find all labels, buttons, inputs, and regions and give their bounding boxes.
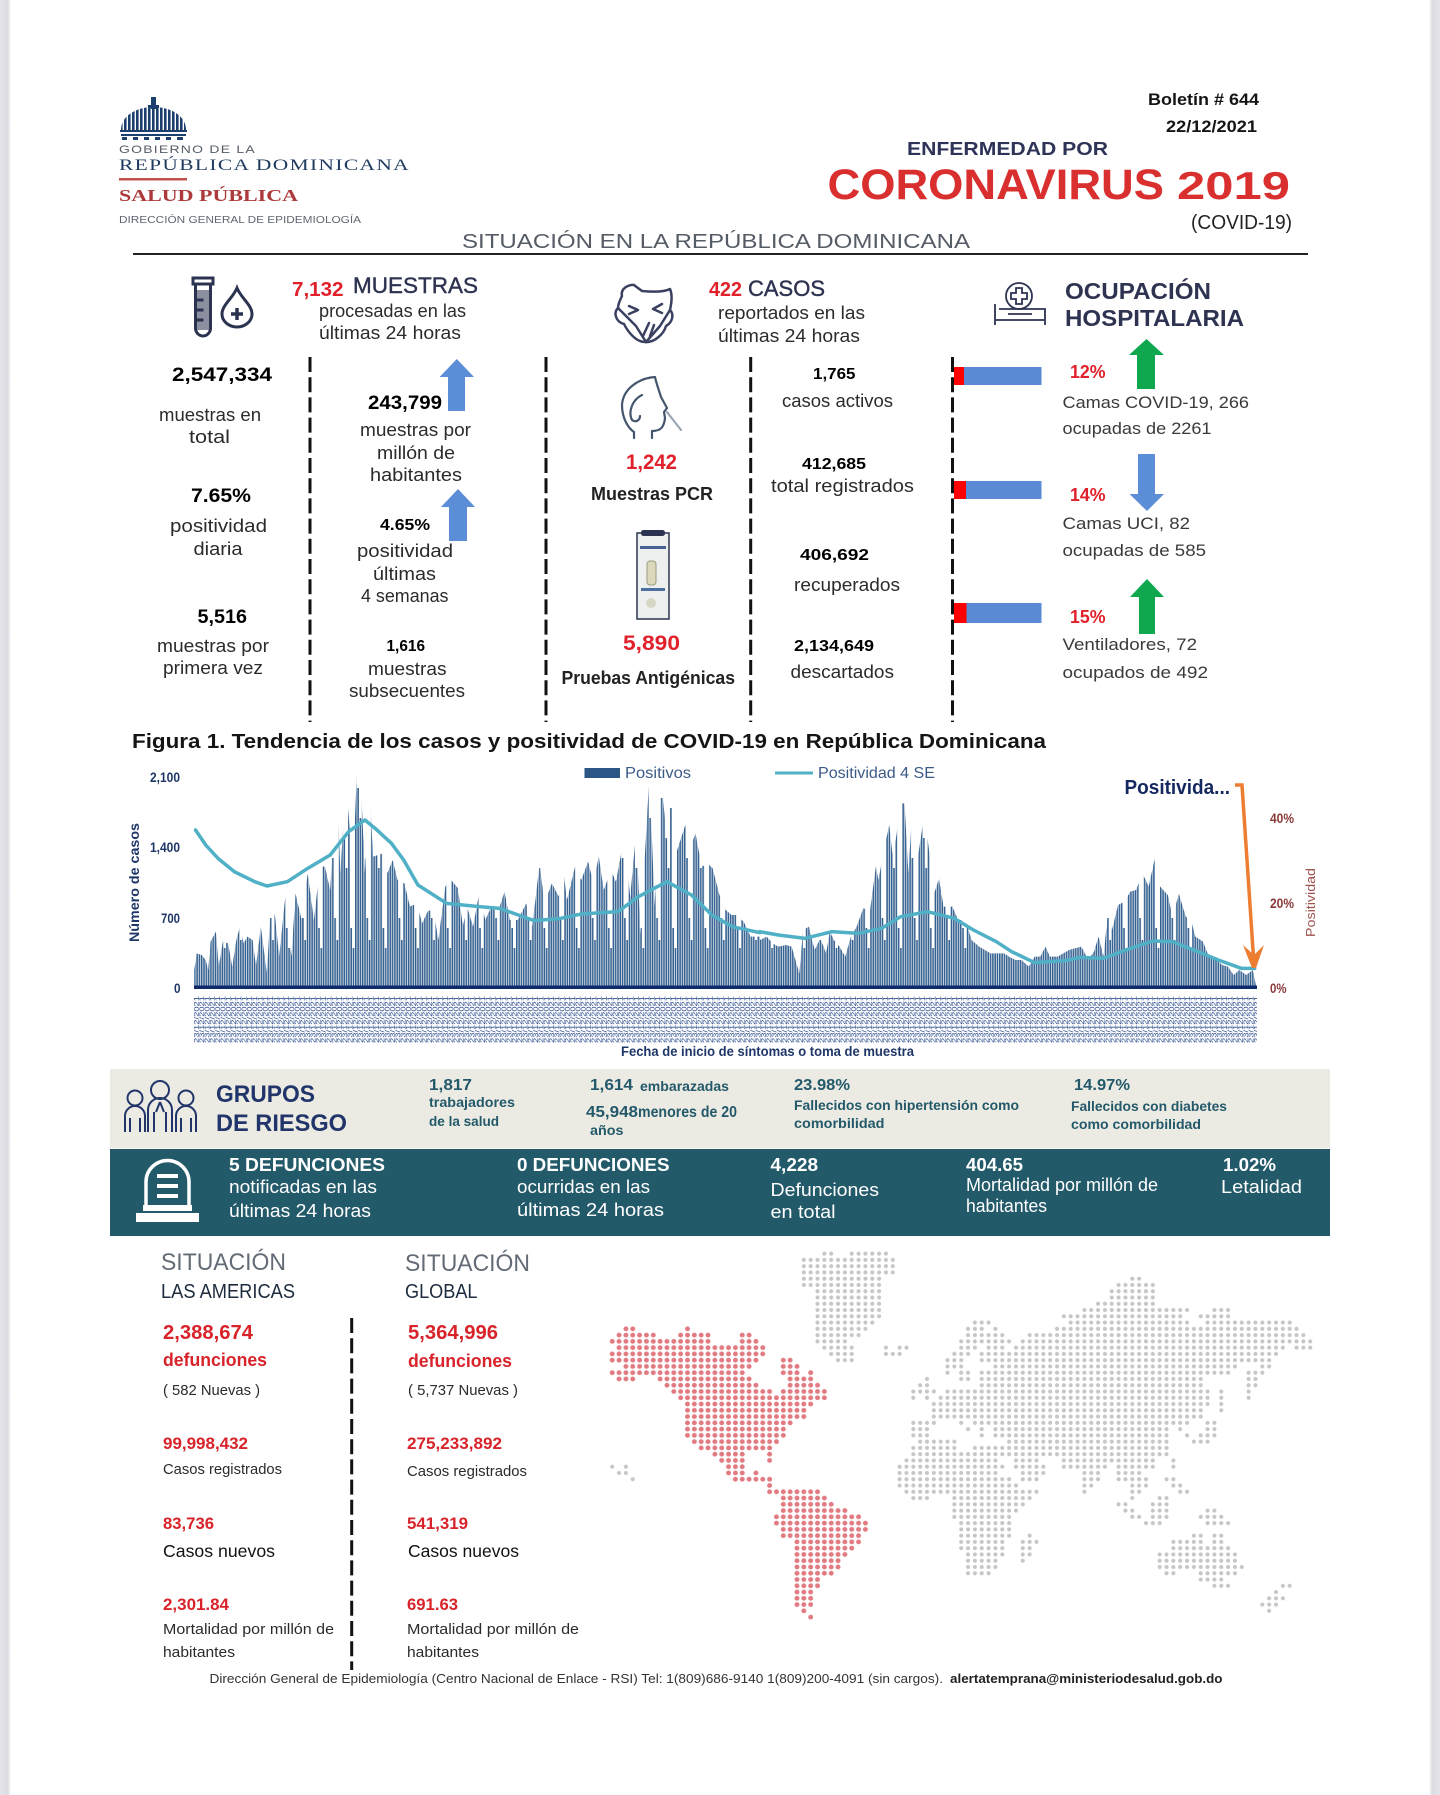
logo: Gobierno de la República Dominicana, Salud Pública: REPÚBLICA DOMINICANA	[119, 157, 410, 174]
panel: ocupación hospitalaria: ocupados de 492	[1062, 663, 1208, 682]
icon: blood drop	[222, 288, 252, 327]
panel: ocupación hospitalaria: ocupadas de 585	[1062, 541, 1206, 560]
panel: defunciones: últimas 24 horas	[229, 1201, 371, 1221]
title: CORONAVIRUS	[828, 161, 1164, 209]
panel: situación global: ( 5,737 Nuevas )	[408, 1383, 518, 1399]
panel: ocupación hospitalaria: OCUPACIÓN	[1065, 277, 1211, 304]
panel: grupos de riesgo: embarazadas	[640, 1078, 729, 1094]
arrow: blue down, camas UCI	[1130, 454, 1164, 511]
panel: muestras	[157, 273, 478, 701]
panel: grupos de riesgo: de la salud	[429, 1113, 499, 1129]
dashed column dividers	[310, 357, 952, 722]
panel: muestras: muestras por	[157, 636, 269, 656]
panel: muestras: positividad	[357, 541, 453, 561]
panel: defunciones: notificadas en las	[229, 1177, 377, 1197]
panel: ocupación hospitalaria: HOSPITALARIA	[1065, 305, 1244, 331]
panel: grupos de riesgo: 23.98%	[794, 1077, 850, 1094]
panel: casos: 2,134,649	[794, 638, 874, 655]
panel: muestras: procesadas en las	[319, 301, 466, 321]
line: positividad 4 SE	[196, 820, 1255, 968]
bulletin number and date: Boletín # 644	[1148, 90, 1260, 109]
callout: positividad arrow	[1124, 777, 1264, 968]
panel: casos: reportados en las	[718, 303, 865, 323]
panel: defunciones: 5 DEFUNCIONES	[229, 1155, 385, 1175]
panel: grupos de riesgo: comorbilidad	[794, 1115, 884, 1131]
right axis labels: Positividad	[1303, 868, 1318, 937]
panel: muestras: positividad	[170, 516, 267, 536]
title: ENFERMEDAD POR	[907, 139, 1108, 159]
panel: muestras: 243,799	[368, 393, 442, 414]
panel: casos: 5,890	[623, 632, 680, 655]
panel: defunciones: en total	[770, 1202, 836, 1222]
logo: Gobierno de la República Dominicana, Salud Pública: SALUD PÚBLICA	[119, 186, 299, 205]
footer contact line	[210, 1671, 1223, 1686]
panel: casos: recuperados	[794, 575, 900, 595]
panel: grupos de riesgo: 45,948	[586, 1104, 638, 1121]
left axis labels: 700	[161, 910, 180, 926]
footer contact line: Dirección General de Epidemiología (Centro Nacional de Enlace - RSI) Tel: 1(809)686-9140 1(809)200-4091 (sin cargos).	[210, 1671, 943, 1686]
bulletin number and date: 22/12/2021	[1166, 117, 1257, 136]
dot world map	[609, 1250, 1314, 1620]
panel: grupos de riesgo: trabajadores	[429, 1094, 515, 1110]
title: 2019	[1177, 165, 1290, 208]
icon: hospital bed	[995, 283, 1045, 325]
panel: grupos de riesgo: 14.97%	[1074, 1077, 1130, 1094]
icon: test tube	[193, 278, 213, 336]
left axis labels: 0	[174, 980, 181, 996]
bar: camas UCI	[954, 481, 1042, 499]
panel: casos: 422	[709, 279, 742, 301]
panel: muestras: 4 semanas	[361, 586, 448, 606]
panel: grupos de riesgo: GRUPOS	[216, 1081, 315, 1108]
panel: ocupación hospitalaria: 15%	[1070, 607, 1106, 627]
panel: defunciones: 0 DEFUNCIONES	[517, 1155, 670, 1175]
left axis labels: 2,100	[150, 769, 180, 785]
panel: situación global: defunciones	[408, 1351, 512, 1371]
panel: muestras: 7.65%	[191, 486, 251, 507]
panel: situación las Américas: 2,388,674	[163, 1322, 254, 1344]
panel: defunciones: últimas 24 horas	[517, 1200, 664, 1220]
panel: muestras: 1,616	[386, 638, 425, 655]
panel: ocupación hospitalaria: Camas COVID-19, 266	[1062, 393, 1249, 412]
panel: situación global: Casos registrados	[407, 1464, 527, 1480]
bar: camas COVID-19	[954, 367, 1042, 385]
subtitle with rule: SITUACIÓN EN LA REPÚBLICA DOMINICANA	[462, 230, 971, 253]
title	[828, 139, 1292, 234]
panel: casos: CASOS	[748, 276, 825, 301]
arrow: up, positividad últimas 4 semanas	[441, 489, 475, 541]
icon: tombstone	[136, 1160, 199, 1222]
panel: situación las Américas: LAS AMERICAS	[161, 1281, 295, 1303]
panel: grupos de riesgo: años	[590, 1122, 624, 1138]
panel: casos: 406,692	[800, 547, 869, 564]
panel: muestras: 2,547,334	[172, 365, 273, 386]
bar: ventiladores	[954, 603, 1042, 623]
x axis baseline	[194, 986, 1257, 989]
panel: casos: últimas 24 horas	[718, 326, 860, 346]
panel: muestras: subsecuentes	[349, 681, 465, 701]
panel: situación global: 541,319	[407, 1514, 468, 1533]
panel: ocupación hospitalaria: Camas UCI, 82	[1062, 514, 1190, 533]
panel: situación las Américas: defunciones	[163, 1350, 267, 1370]
panel: situación las Américas: habitantes	[163, 1645, 235, 1661]
panel: casos: descartados	[790, 662, 894, 682]
right axis labels: 40%	[1270, 810, 1294, 826]
panel: ocupación hospitalaria: Ventiladores, 72	[1062, 635, 1197, 654]
icon: people	[125, 1081, 196, 1132]
panel: grupos de riesgo: menores de 20	[638, 1104, 737, 1121]
panel: muestras: total	[189, 427, 230, 447]
panel: muestras: últimas 24 horas	[319, 323, 461, 343]
panel: grupos de riesgo: como comorbilidad	[1071, 1116, 1201, 1132]
panel: situación global: 275,233,892	[407, 1434, 502, 1453]
icon: face with mask	[616, 285, 672, 342]
panel: defunciones: Mortalidad por millón de	[966, 1175, 1158, 1195]
panel: casos: casos activos	[782, 391, 893, 411]
panel: muestras: muestras por	[360, 420, 471, 440]
panel: situación global: 5,364,996	[408, 1322, 498, 1344]
panel: defunciones: habitantes	[966, 1196, 1047, 1216]
bulletin number and date	[1148, 90, 1260, 136]
panel: situación global: SITUACIÓN	[405, 1250, 530, 1277]
x axis title: Fecha de inicio de síntomas o toma de muestra	[621, 1043, 914, 1059]
icon: head with nasal swab	[622, 377, 681, 438]
legend	[584, 765, 935, 782]
panel: ocupación hospitalaria: ocupadas de 2261	[1062, 419, 1212, 438]
panel: situación las Américas: 99,998,432	[163, 1434, 248, 1453]
panel: muestras: MUESTRAS	[353, 273, 478, 298]
panel: casos: Pruebas Antigénicas	[562, 668, 735, 688]
legend: Positivos	[625, 765, 691, 782]
panel: situación las Américas: Casos registrados	[163, 1462, 282, 1478]
icon: capitol dome	[120, 97, 187, 140]
panel: situación las Américas	[161, 1249, 334, 1661]
panel: casos: 1,765	[813, 366, 856, 383]
arrow: up, muestras por millón	[440, 359, 474, 411]
panel: situación las Américas: 83,736	[163, 1514, 214, 1533]
panel: muestras: primera vez	[163, 658, 263, 678]
panel: casos	[562, 276, 914, 688]
panel: ocupación hospitalaria: 14%	[1070, 485, 1106, 505]
panel: muestras: 4.65%	[380, 517, 430, 534]
panel: situación global: habitantes	[407, 1645, 479, 1661]
panel: casos: Muestras PCR	[591, 484, 713, 504]
panel: muestras: diaria	[194, 539, 244, 559]
logo: Gobierno de la República Dominicana, Salud Pública: GOBIERNO DE LA	[119, 144, 256, 156]
logo: Gobierno de la República Dominicana, Salud Pública	[119, 97, 410, 226]
chart: tendencia de casos y positividad	[126, 765, 1318, 1059]
figure title: Figura 1. Tendencia de los casos y positividad de COVID-19 en República Dominicana	[132, 731, 1047, 753]
panel: defunciones: Letalidad	[1221, 1177, 1302, 1197]
panel: grupos de riesgo: 1,614	[590, 1077, 633, 1094]
right axis labels: 20%	[1270, 895, 1294, 911]
icon: antigen test device	[637, 530, 669, 619]
left axis labels	[126, 769, 181, 996]
panel: muestras: 5,516	[198, 607, 247, 628]
panel: situación global: GLOBAL	[405, 1281, 478, 1303]
panel: defunciones: 4,228	[770, 1155, 818, 1175]
divider between regional columns	[350, 1318, 353, 1670]
panel: muestras: muestras	[368, 659, 446, 679]
right axis labels: 0%	[1270, 980, 1287, 996]
title: (COVID-19)	[1191, 212, 1292, 234]
panel: defunciones: ocurridas en las	[517, 1177, 650, 1197]
panel: situación global: Casos nuevos	[408, 1541, 519, 1561]
panel: grupos de riesgo: Fallecidos con hipertensión como	[794, 1097, 1019, 1113]
panel: situación las Américas: Casos nuevos	[163, 1541, 275, 1561]
panel: casos: 412,685	[802, 456, 866, 473]
map: rest of world in grey	[609, 1250, 1314, 1614]
legend: Positividad 4 SE	[818, 765, 935, 782]
x axis dates	[194, 996, 1257, 1044]
panel: muestras: habitantes	[370, 465, 462, 485]
panel: situación las Américas: ( 582 Nuevas )	[163, 1383, 260, 1399]
panel: situación las Américas: SITUACIÓN	[161, 1249, 286, 1276]
panel: muestras: muestras en	[159, 405, 261, 425]
left axis labels: 1,400	[150, 839, 180, 855]
panel: situación global	[405, 1250, 579, 1661]
panel: muestras: últimas	[373, 564, 436, 584]
panel: ocupación hospitalaria	[954, 277, 1249, 682]
panel: defunciones	[110, 1149, 1330, 1236]
map: Americas in red	[609, 1326, 869, 1620]
panel: casos: total registrados	[771, 476, 914, 496]
panel: grupos de riesgo: DE RIESGO	[216, 1110, 347, 1137]
panel: ocupación hospitalaria: 12%	[1070, 362, 1106, 382]
panel: grupos de riesgo: 1,817	[429, 1077, 472, 1094]
panel: defunciones: 404.65	[966, 1155, 1023, 1175]
arrow: green up, camas COVID-19	[1129, 339, 1164, 389]
panel: defunciones: 1.02%	[1223, 1155, 1276, 1175]
bars: positivos	[194, 776, 1258, 988]
footer contact line: alertatemprana@ministeriodesalud.gob.do	[950, 1671, 1223, 1686]
panel: situación las Américas: 2,301.84	[163, 1595, 230, 1614]
panel: muestras: 7,132	[292, 279, 344, 301]
panel: situación las Américas: Mortalidad por millón de	[163, 1622, 334, 1638]
panel: defunciones: Defunciones	[770, 1180, 879, 1200]
panel: grupos de riesgo	[110, 1069, 1330, 1148]
right axis labels	[1270, 810, 1318, 996]
callout: positividad arrow: Positivida...	[1124, 777, 1230, 799]
panel: grupos de riesgo: Fallecidos con diabetes	[1071, 1098, 1227, 1114]
arrow: green up, ventiladores	[1130, 579, 1164, 634]
panel: muestras: millón de	[377, 443, 455, 463]
panel: casos: 1,242	[626, 451, 677, 474]
panel: situación global: 691.63	[407, 1595, 458, 1614]
panel: situación global: Mortalidad por millón de	[407, 1622, 579, 1638]
left axis labels: Número de casos	[126, 823, 142, 942]
logo: Gobierno de la República Dominicana, Salud Pública: DIRECCIÓN GENERAL DE EPIDEMIOLOGÍA	[119, 213, 361, 226]
